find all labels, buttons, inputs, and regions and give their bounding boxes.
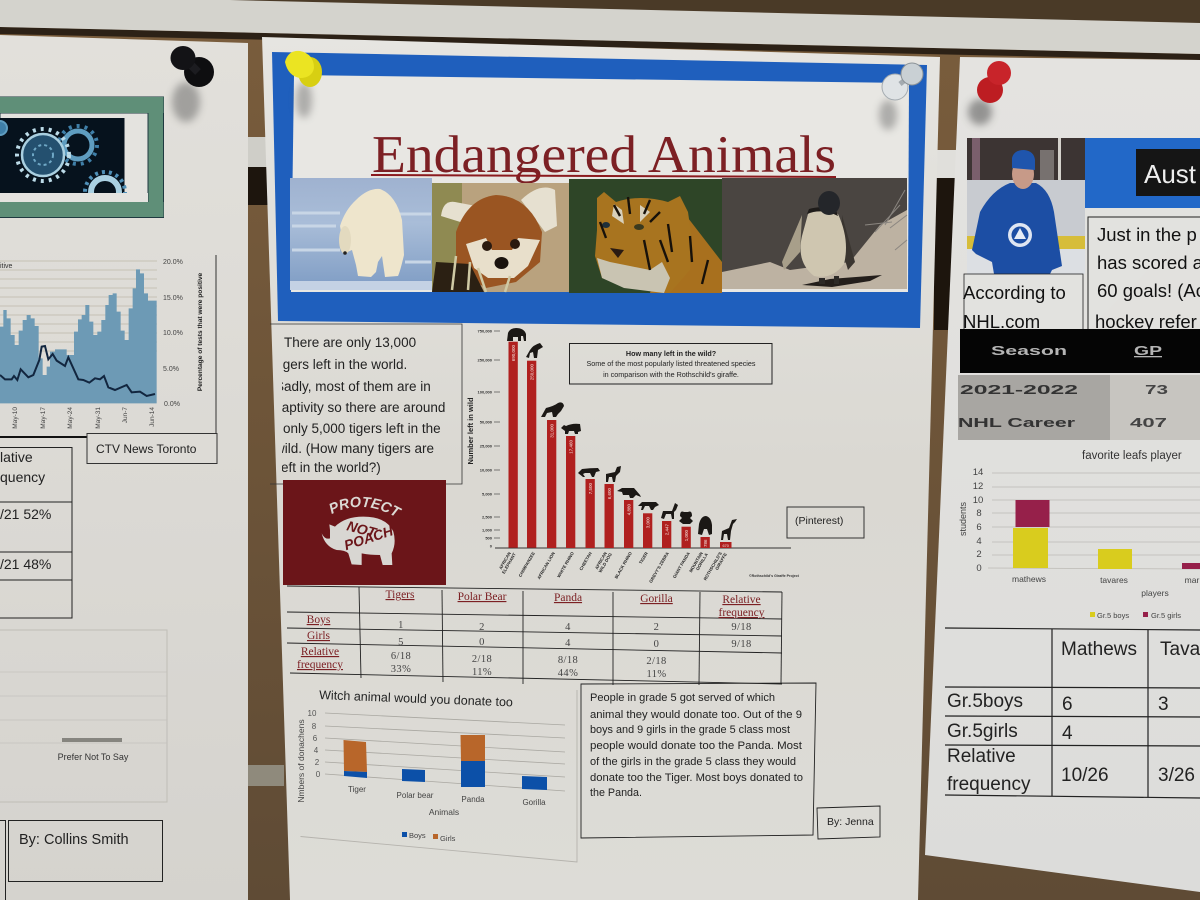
- text: tiger facts: Sadly, most of them are in: [275, 379, 431, 394]
- student votes table: 6: [1062, 694, 1073, 715]
- text: goals note: hockey refer: [1095, 311, 1197, 332]
- text: survey summary: people would donate too the Panda. Most: [590, 740, 802, 752]
- stats table: NHL Career: [958, 415, 1075, 430]
- y axis: 750,000: [478, 328, 493, 334]
- stats table: 2021-2022: [960, 382, 1078, 397]
- table: animal votes: 4: [565, 638, 571, 649]
- table: animal votes: 0: [479, 637, 485, 648]
- chart: witch animal would you donate too: Tiger: [348, 785, 366, 794]
- y axis: 100,000: [478, 390, 493, 394]
- bar values: 7,500: [588, 483, 593, 494]
- relative frequency table: /21 48%: [0, 556, 51, 572]
- favorite leafs player chart: 0: [976, 563, 982, 574]
- bar names: ROTHSCHILD'S: [703, 551, 723, 581]
- covid positivity chart: 5.0%: [163, 366, 179, 373]
- favorite leafs player chart: favorite leafs player: [1082, 450, 1182, 462]
- text: tiger facts: wild. (How many tigers are: [274, 441, 434, 456]
- chart: witch animal would you donate too: 6: [313, 734, 318, 743]
- bar names: GREVY'S ZEBRA: [648, 551, 670, 584]
- covid positivity chart: [0, 255, 216, 437]
- icon: red push pin: [968, 61, 1011, 125]
- text: tiger facts: [270, 324, 462, 484]
- source box: Pinterest: [787, 507, 864, 538]
- bar values: 6,600: [607, 488, 612, 499]
- relative frequency table: quency: [0, 469, 45, 485]
- chart: how many left in the wild: [466, 328, 800, 584]
- bar values: 250,000: [530, 364, 534, 380]
- relative frequency table: lative: [0, 449, 33, 465]
- chart: witch animal would you donate too: Panda: [461, 795, 485, 804]
- chart: witch animal would you donate too: 2: [315, 758, 320, 767]
- text: tiger facts: There are only 13,000: [284, 335, 416, 350]
- icon: black push pin: [170, 46, 214, 122]
- stats table: 73: [1145, 382, 1168, 397]
- chart: witch animal would you donate too: Nmbers of donachens: [296, 719, 306, 803]
- student votes table: Gr.5girls: [947, 721, 1018, 742]
- table: animal votes: Polar Bear: [458, 591, 507, 603]
- covid positivity chart: May-24: [67, 407, 74, 429]
- icon: clear push pin: [879, 63, 923, 130]
- text: tiger facts: left in the world?): [278, 460, 381, 475]
- bar values: 31,000: [550, 424, 554, 438]
- covid positivity chart: May-31: [95, 407, 102, 429]
- student votes table: 4: [1062, 723, 1073, 744]
- icon: yellow push pin: [285, 51, 322, 118]
- bar names: CHEETAH: [578, 551, 593, 571]
- favorite leafs player chart: 8: [976, 508, 982, 519]
- covid positivity chart: 0.0%: [164, 401, 180, 408]
- student votes table: Relative: [947, 746, 1016, 767]
- chart: witch animal would you donate too: Animals: [429, 807, 459, 817]
- bar names: CHIMPANZEE: [517, 551, 536, 578]
- badge: protect not poach: POACH: [342, 522, 396, 553]
- student votes table: 3: [1158, 694, 1169, 715]
- table: animal votes: Relative: [722, 594, 761, 606]
- relative frequency table: [0, 448, 72, 618]
- text: survey summary: donate too the Tiger. Most boys donated to: [590, 772, 803, 784]
- table: animal votes: Panda: [554, 592, 582, 604]
- chart: witch animal would you donate too: Witch animal would you donate too: [319, 688, 513, 709]
- bar names: GIANT PANDA: [672, 551, 691, 579]
- y axis: 10,000: [480, 468, 493, 472]
- chart: how many left in the wild: 670: [723, 544, 729, 548]
- bar names: AFRICAN: [594, 551, 608, 570]
- table: animal votes: 11%: [472, 667, 492, 678]
- bar names: ELEPHANT: [501, 552, 517, 575]
- table: animal votes: 2/18: [472, 654, 492, 665]
- table: animal votes: 5: [398, 637, 404, 648]
- bar names: AFRICAN LION: [536, 551, 556, 580]
- covid positivity chart: Percentage of tests that were positive: [197, 272, 204, 391]
- favorite leafs player chart: players: [1141, 588, 1169, 598]
- source box: CTV News Toronto: CTV News Toronto: [96, 442, 197, 456]
- byline: Collins Smith: [0, 820, 162, 900]
- text: According to NHL.com: NHL.com: [963, 311, 1040, 332]
- byline: Jenna: [817, 806, 880, 839]
- covid positivity chart: Jun-7: [122, 407, 129, 423]
- text: goals note: Just in the p: [1097, 224, 1197, 245]
- y axis: [466, 328, 500, 548]
- text: survey summary: of the girls in the grade 5 class they would: [590, 756, 796, 768]
- text: tiger facts: tigers left in the world.: [276, 357, 407, 372]
- student votes table: Mathews: [1061, 639, 1137, 660]
- chart: witch animal would you donate too: Boys: [409, 831, 426, 840]
- text: tiger facts: only 5,000 tigers left in the: [283, 421, 441, 436]
- panel: left poster: [0, 35, 248, 900]
- title: Endangered Animals: [372, 126, 836, 184]
- y axis: 5,000: [482, 492, 493, 496]
- bar names: MOUNTAIN: [688, 551, 704, 573]
- bar values: 4,880: [626, 504, 632, 515]
- hockey player photo: [967, 138, 1085, 274]
- bar names: GORILLA: [695, 552, 709, 571]
- bar names: BLACK RHINO: [613, 550, 633, 580]
- favorite leafs player chart: tavares: [1100, 575, 1128, 585]
- text: survey summary: [581, 683, 816, 838]
- covid positivity chart: May-17: [40, 407, 47, 429]
- photo: penguin: [722, 178, 907, 289]
- student votes table: [945, 628, 1200, 798]
- table: animal votes: 9/18: [731, 622, 752, 633]
- y axis: Number left in wild: [466, 397, 475, 465]
- text: According to NHL.com: According to: [963, 282, 1066, 303]
- bar values: [511, 345, 708, 547]
- stats table: Season: [991, 343, 1067, 358]
- chart: witch animal would you donate too: Gorilla: [522, 798, 546, 807]
- badge: protect not poach: PROTECT: [330, 496, 402, 516]
- y axis: 50,000: [480, 420, 493, 424]
- stats table: [958, 329, 1200, 440]
- bar values: 2,447: [664, 524, 670, 535]
- table: animal votes: 0: [654, 639, 659, 650]
- table: animal votes: Gorilla: [640, 593, 673, 605]
- covid positivity chart: 15.0%: [163, 295, 183, 302]
- student votes table: 3/26: [1158, 765, 1195, 786]
- table: animal votes: 33%: [391, 664, 411, 675]
- stats table: GP: [1134, 343, 1162, 358]
- chart title box: [570, 344, 772, 384]
- blue header with name: [1085, 138, 1200, 208]
- y axis: 1,000: [482, 528, 493, 532]
- bar values: 786: [703, 539, 708, 547]
- favorite leafs player chart: Gr.5 boys: [1097, 611, 1129, 620]
- relative frequency table: /21 52%: [0, 506, 51, 522]
- bar values: 17,460: [568, 440, 574, 454]
- photo: red panda: [432, 183, 569, 292]
- table: animal votes: Girls: [307, 630, 331, 642]
- table: animal votes: Tigers: [386, 589, 415, 601]
- chart: witch animal would you donate too: 10: [308, 709, 317, 718]
- chart: witch animal would you donate too: 8: [312, 722, 317, 731]
- bar names: WILD DOG: [598, 551, 613, 574]
- source box: Pinterest: (Pinterest): [795, 515, 843, 527]
- text: goals note: [1088, 217, 1200, 332]
- photo: tiger: [569, 179, 722, 293]
- table: animal votes: 4: [565, 622, 571, 633]
- badge: protect not poach: [283, 480, 446, 585]
- covid positivity chart: 20.0%: [163, 259, 183, 266]
- panel: center poster: [262, 37, 940, 900]
- table: animal votes: Boys: [307, 614, 331, 626]
- table: animal votes: 2: [479, 622, 485, 633]
- favorite leafs player chart: [958, 450, 1200, 620]
- favorite leafs player chart: students: [958, 501, 968, 536]
- favorite leafs player chart: 10: [973, 495, 983, 506]
- covid positivity chart: itive: [0, 263, 13, 270]
- bar names: TIGER: [638, 550, 649, 565]
- panel: right poster: [925, 57, 1200, 892]
- bar values: 690,000: [511, 345, 516, 361]
- covid positivity chart: Jun-14: [149, 407, 156, 427]
- bars: [508, 342, 732, 548]
- text: tiger facts: captivity so there are around: [275, 400, 445, 415]
- table: animal votes: 8/18: [558, 655, 578, 666]
- chart title box: Some of the most popularly listed threatened species: [586, 359, 756, 368]
- bar values: 3,000: [646, 517, 650, 528]
- favorite leafs player chart: 14: [973, 467, 983, 478]
- bar names: [498, 550, 728, 584]
- chart: witch animal would you donate too: 4: [314, 746, 319, 755]
- survey chart fragment: [0, 630, 167, 802]
- table: animal votes: 2/18: [646, 656, 667, 667]
- bar names: AFRICAN: [498, 551, 512, 570]
- table: animal votes: [287, 586, 782, 685]
- text: survey summary: People in grade 5 got served of which: [590, 692, 775, 704]
- favorite leafs player chart: 4: [976, 536, 982, 547]
- favorite leafs player chart: 2: [976, 549, 982, 560]
- table: animal votes: 11%: [646, 669, 667, 680]
- chart: how many left in the wild: ©Rothschild's Giraffe Project: [749, 574, 800, 578]
- bar names: GIRAFFE: [714, 552, 728, 571]
- favorite leafs player chart: 6: [976, 522, 982, 533]
- stats table: 407: [1130, 415, 1167, 430]
- y axis: 500: [485, 536, 493, 540]
- survey chart fragment: Prefer Not To Say: [58, 752, 129, 762]
- photo: polar bear: [290, 178, 432, 290]
- badge: protect not poach: NOT: [345, 517, 379, 541]
- covid positivity chart: 10.0%: [163, 330, 183, 337]
- text: goals note: has scored a: [1097, 252, 1200, 273]
- byline: Jenna: By: Jenna: [827, 816, 874, 828]
- table: animal votes: 2: [654, 622, 659, 633]
- chart: witch animal would you donate too: Girls: [440, 834, 456, 843]
- favorite leafs player chart: mar: [1185, 575, 1199, 585]
- table: animal votes: 6/18: [391, 651, 411, 662]
- chart title box: in comparison with the Rothschild's giraffe.: [603, 370, 739, 379]
- chart title box: How many left in the wild?: [626, 349, 716, 358]
- table: animal votes: frequency: [719, 607, 765, 619]
- bar values: 1,000: [684, 530, 689, 541]
- byline: Collins Smith: By: Collins Smith: [19, 832, 129, 848]
- favorite leafs player chart: 12: [973, 481, 983, 492]
- y axis: 0: [490, 544, 493, 548]
- chart: witch animal would you donate too: 0: [316, 770, 321, 779]
- icon: white rhino: [322, 517, 395, 565]
- text: survey summary: boys and 9 girls in the grade 5 class most: [590, 724, 790, 736]
- y axis: 2,500: [482, 514, 493, 520]
- virus picture: [0, 97, 164, 218]
- text: According to NHL.com: [963, 274, 1083, 332]
- favorite leafs player chart: Gr.5 girls: [1151, 611, 1181, 620]
- chart: witch animal would you donate too: Polar bear: [397, 791, 434, 800]
- source box: CTV News Toronto: [87, 434, 217, 464]
- y axis: 25,000: [480, 444, 493, 448]
- student votes table: frequency: [947, 774, 1031, 795]
- bar names: WHITE RHINO: [556, 550, 575, 579]
- blue header with name: Aust: [1144, 159, 1197, 189]
- student votes table: Gr.5boys: [947, 691, 1023, 712]
- text: survey summary: the Panda.: [590, 787, 642, 799]
- blue banner frame: [272, 52, 927, 328]
- chart: witch animal would you donate too: [296, 688, 577, 862]
- table: animal votes: 9/18: [731, 639, 752, 650]
- animal silhouettes: [507, 328, 737, 540]
- favorite leafs player chart: mathews: [1012, 574, 1046, 584]
- table: animal votes: 1: [398, 620, 404, 631]
- text: survey summary: animal they would donate too. Out of the 9: [590, 709, 802, 721]
- table: animal votes: Relative: [301, 646, 339, 658]
- covid positivity chart: May-10: [12, 407, 19, 429]
- student votes table: Tava: [1160, 639, 1200, 660]
- y axis: 250,000: [478, 358, 493, 362]
- table: animal votes: 44%: [558, 668, 578, 679]
- table: animal votes: frequency: [297, 659, 343, 671]
- student votes table: 10/26: [1061, 765, 1109, 786]
